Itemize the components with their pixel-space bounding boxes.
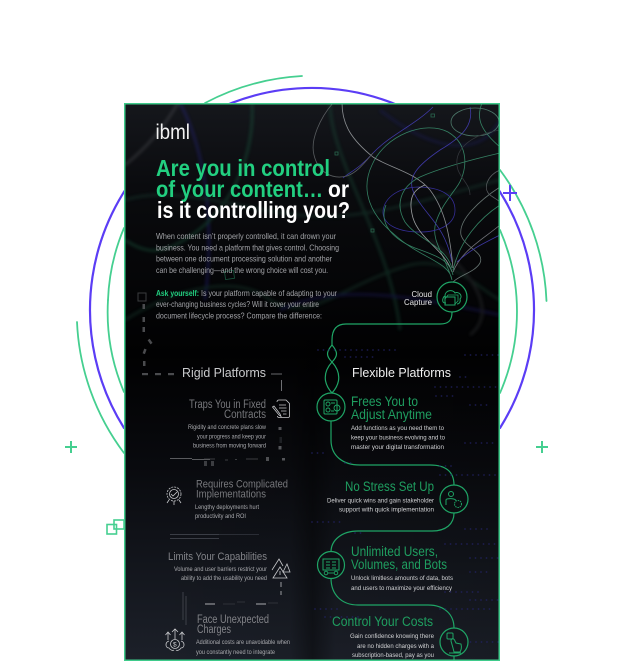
flexible item: frees you to adjust anytime: keep your business evolving and to <box>351 434 445 442</box>
flexible item: control your costs: are no hidden charges with a <box>357 643 434 650</box>
background blurred strands <box>125 103 500 335</box>
cloud capture label: Capture <box>404 297 432 307</box>
icon: server stack <box>318 552 344 578</box>
flexible item: control your costs: Gain confidence knowing there <box>350 633 434 640</box>
title: Are you in control <box>156 155 330 181</box>
ask yourself text block: ever-changing business cycles? Will it cover your entire <box>156 300 319 309</box>
ask yourself text block: document lifecycle process? Compare the difference: <box>156 312 322 320</box>
rigid item: traps you in fixed contracts: your progress and keep your <box>197 434 266 440</box>
intro text block: When content isn’t properly controlled, it can drown your <box>156 232 336 241</box>
panel: infographic card <box>125 103 500 661</box>
flexible item: frees you to adjust anytime: Adjust Anytime <box>351 407 432 422</box>
icon: warning triangles <box>272 559 290 578</box>
rigid item: limits your capabilities: ability to add the usability you need <box>181 576 267 582</box>
title: is it controlling you? <box>157 197 350 223</box>
icon: hand pressing coin <box>440 628 468 656</box>
thin swirl lines rising from cloud capture <box>224 103 500 282</box>
ask yourself text block: Is your platform capable of adapting to your <box>201 289 337 298</box>
dotted data pattern <box>312 350 500 642</box>
title: or <box>328 176 349 202</box>
rigid item: requires complicated implementations: Implementations <box>196 488 266 500</box>
decorative arcs behind panel <box>77 76 546 453</box>
dashed route into rigid platforms <box>138 293 174 375</box>
divider lines <box>170 534 259 539</box>
intro text block: can be challenging—and the wrong choice will cost you. <box>156 266 328 275</box>
rigid item: traps you in fixed contracts: Rigidity and concrete plans slow <box>188 425 267 431</box>
heading: rigid platforms <box>183 368 282 391</box>
heading: flexible platforms: Flexible Platforms <box>352 365 451 380</box>
green connector path <box>325 282 454 661</box>
flexible item: no stress set up: Deliver quick wins and gain stakeholder <box>327 498 434 504</box>
dashed divider after contracts <box>170 427 285 466</box>
icon: purple plus <box>503 185 517 201</box>
title: of your content… <box>156 176 323 202</box>
rigid item: traps you in fixed contracts <box>188 399 290 450</box>
rigid item: limits your capabilities: Limits Your Capabilities <box>168 551 267 563</box>
flexible item: unlimited users: Volumes, and Bots <box>351 557 447 572</box>
flexible item: frees you to adjust anytime: Frees You to <box>351 394 418 409</box>
icon: green plus left <box>65 441 77 453</box>
flexible item: unlimited users: Unlock limitless amounts of data, bots <box>351 575 453 582</box>
rigid item: traps you in fixed contracts: Traps You in Fixed <box>189 399 266 411</box>
flexible item: no stress set up: No Stress Set Up <box>345 479 434 494</box>
rigid item: limits your capabilities: Volume and user barriers restrict your <box>174 567 267 573</box>
intro text block: between one document processing solution and another <box>156 254 332 264</box>
rigid item: face unexpected charges: Face Unexpected <box>197 614 269 626</box>
ask yourself text block: Ask yourself: <box>156 289 199 298</box>
flexible item: no stress set up <box>327 479 468 514</box>
cloud capture label: Cloud <box>412 289 432 299</box>
rigid item: face unexpected charges: you constantly need to integrate <box>196 650 276 656</box>
rigid item: requires complicated implementations: Lengthy deployments hurt <box>195 505 259 511</box>
rigid item: requires complicated implementations: productivity and ROI <box>195 514 246 520</box>
flexible item: unlimited users: and users to maximize your efficiency <box>351 585 453 592</box>
icon: gear and arrows <box>167 487 181 505</box>
flexible item: unlimited users: Unlimited Users, <box>351 544 438 559</box>
flexible item: control your costs: Control Your Costs <box>332 614 433 629</box>
flexible item: control your costs <box>332 614 468 659</box>
cloud capture label <box>404 291 432 306</box>
flexible item: control your costs: subscription-based, pay as you <box>352 652 434 659</box>
flexible item: frees you to adjust anytime <box>317 393 445 451</box>
rigid item: traps you in fixed contracts: Contracts <box>224 409 266 421</box>
heading: rigid platforms: Rigid Platforms <box>182 365 266 380</box>
rigid item: face unexpected charges: Additional costs are unavoidable when <box>196 640 290 646</box>
ask yourself text block <box>156 289 337 320</box>
flexible item: unlimited users <box>318 544 453 592</box>
panel border <box>124 103 500 661</box>
title <box>156 155 350 223</box>
rigid item: requires complicated implementations <box>167 478 288 520</box>
rigid item: face unexpected charges: Charges <box>197 624 231 636</box>
icon: contract document <box>272 400 290 418</box>
icon: person with gear <box>440 485 468 513</box>
intro text block: business. You need a platform that gives control. Choosing <box>156 244 339 252</box>
rigid item: limits your capabilities <box>168 551 290 582</box>
rigid item: requires complicated implementations: Requires Complicated <box>196 478 288 490</box>
logo: ibml: ibml <box>156 121 190 144</box>
flexible item: frees you to adjust anytime: master your digital transformation <box>351 444 444 451</box>
icon: adjustable panels <box>317 393 345 421</box>
rigid item: traps you in fixed contracts: business from moving forward <box>193 444 266 450</box>
flexible item: frees you to adjust anytime: Add functions as you need them to <box>351 425 444 432</box>
rigid item: face unexpected charges <box>166 614 290 656</box>
icon: dollar with rising arrows: $ <box>173 642 177 648</box>
icon: overlapping squares <box>107 520 124 534</box>
icon: cloud capture <box>437 282 467 312</box>
dashed connector before charges <box>183 582 281 625</box>
icon: green plus right <box>536 441 548 453</box>
flexible item: no stress set up: support with quick implementation <box>339 506 434 514</box>
intro text block <box>156 232 339 275</box>
